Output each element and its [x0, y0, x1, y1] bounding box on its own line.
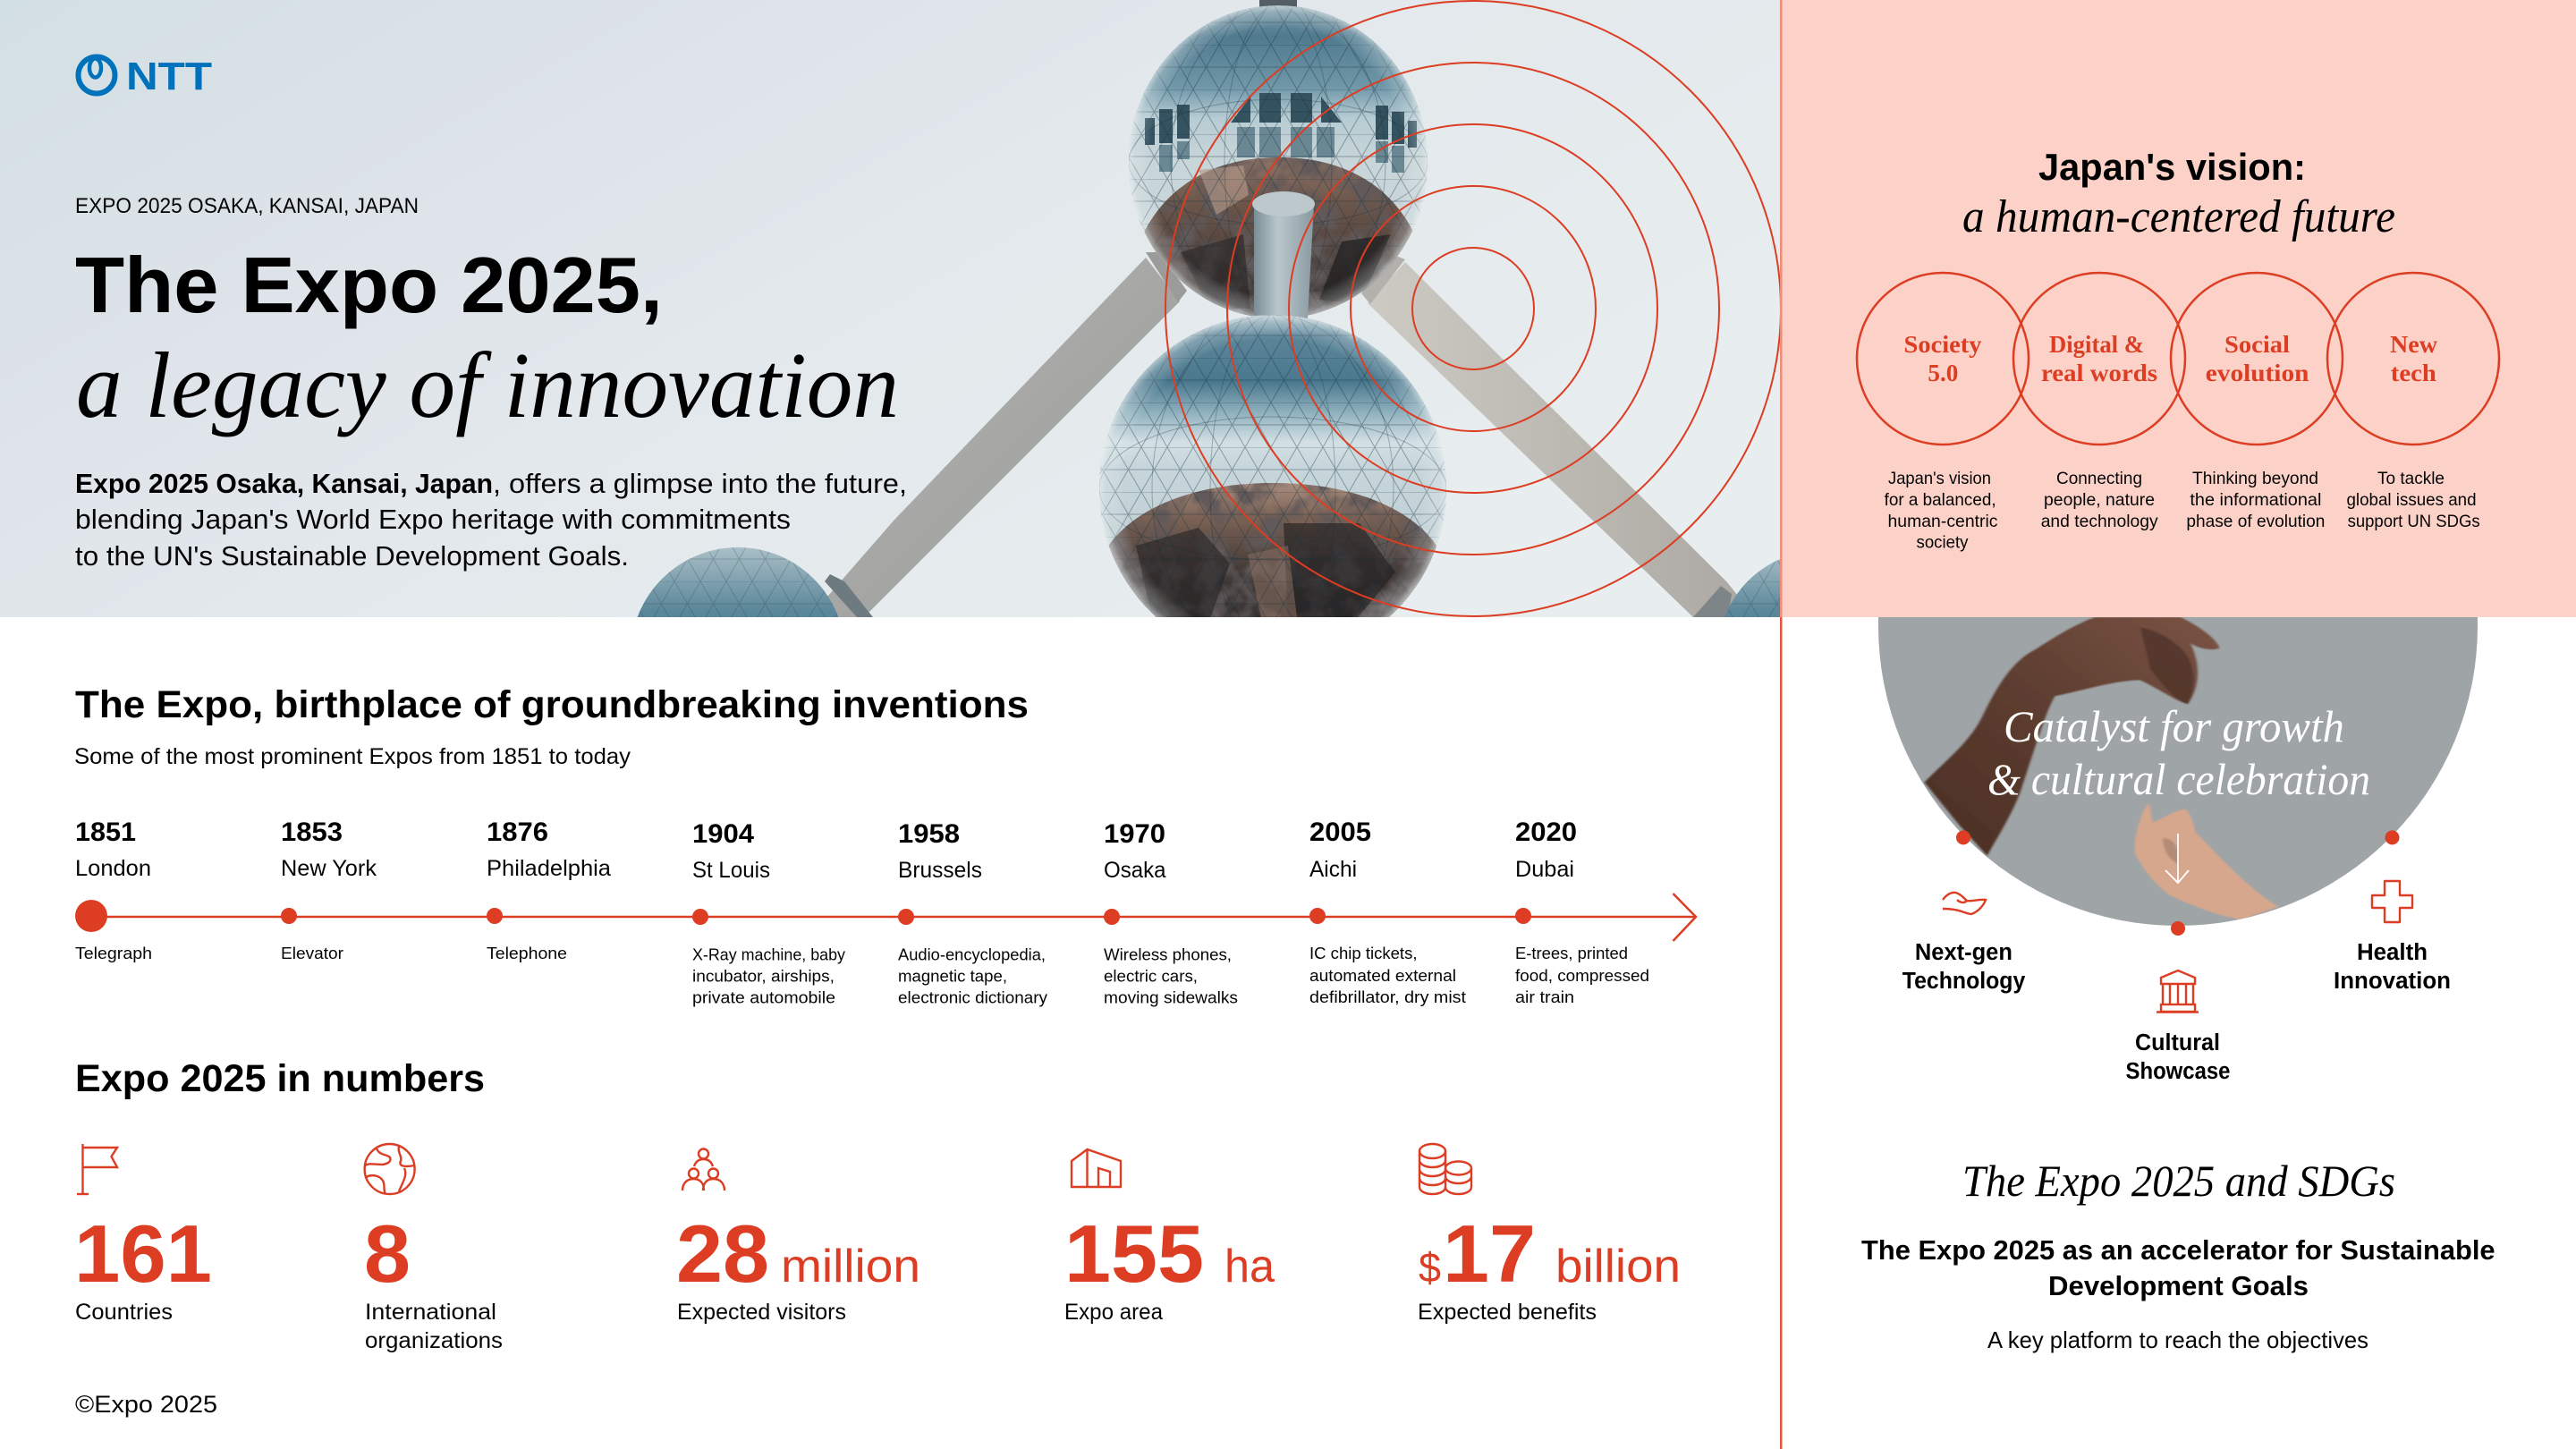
timeline arrow: [91, 894, 1696, 941]
pillar: cultural showcase: [2125, 970, 2231, 1084]
entry: 2020 Dubai: [1515, 818, 1649, 1006]
SDGs subheading: The Expo 2025 as an accelerator for Sustainable: [1861, 1234, 2496, 1266]
entry: 1970 Osaka: Wireless phones,: [1104, 945, 1232, 964]
entry: 1958 Brussels: Audio-encyclopedia,: [898, 945, 1046, 964]
intro paragraph: blending Japan's World Expo heritage with commitments: [75, 504, 791, 535]
intro paragraph: Expo 2025 Osaka, Kansai, Japan: [75, 469, 493, 499]
circle descriptions: Thinking beyond: [2192, 469, 2318, 488]
stat: 161 countries: 161: [74, 1209, 212, 1300]
eyebrow text: EXPO 2025 OSAKA, KANSAI, JAPAN: [75, 194, 419, 218]
stat: 155 ha: [1064, 1149, 1275, 1325]
pillar: cultural showcase: Cultural: [2135, 1030, 2220, 1055]
entry: 2005 Aichi: 2005: [1309, 818, 1371, 847]
stat: 161 countries: Countries: [75, 1300, 173, 1325]
pillar: health innovation: Innovation: [2334, 969, 2451, 994]
circle labels: evolution: [2206, 360, 2309, 386]
pillar: next-gen technology: Next-gen: [1915, 940, 2012, 965]
entry: 1958 Brussels: electronic dictionary: [898, 988, 1048, 1007]
vision heading: Japan's vision:: [2038, 146, 2306, 188]
pillar: next-gen technology: [1902, 893, 2026, 994]
entry: 1970 Osaka: Osaka: [1104, 858, 1166, 883]
entry: 1851 London: London: [75, 856, 151, 881]
four overlapping circles: [1857, 273, 2499, 445]
intro paragraph: [75, 469, 907, 572]
entry: 1970 Osaka: electric cars,: [1104, 967, 1198, 986]
heading: birthplace of inventions: Some of the most prominent Expos from 1851 to today: [74, 744, 631, 769]
entry: 1851 London: Telegraph: [75, 944, 152, 962]
pillar: health innovation: Health: [2357, 940, 2428, 965]
circle descriptions: support UN SDGs: [2348, 512, 2480, 531]
icon: hand: [1943, 893, 1986, 914]
stat: $17 billion: Expected benefits: [1418, 1300, 1597, 1325]
entry: 1904 St Louis: St Louis: [692, 858, 770, 883]
panel: Japan's vision: [1782, 0, 2576, 617]
entry: 1853 New York: [281, 818, 377, 962]
entry: 2005 Aichi: [1309, 818, 1466, 1006]
catalyst heading: [1987, 701, 2370, 804]
stat: 161 countries: [74, 1144, 212, 1325]
entry: 1958 Brussels: Brussels: [898, 858, 982, 883]
panel: hero photo of the Atomium: [0, 0, 1780, 617]
entry: 1970 Osaka: [1104, 819, 1238, 1007]
pillar dots: [1956, 830, 2399, 936]
circle descriptions: society: [1916, 533, 1969, 553]
logo: NTT: [79, 55, 212, 98]
entry: 1876 Philadelphia: Telephone: [487, 944, 567, 962]
stat: 8 international organizations: [364, 1144, 503, 1353]
circle descriptions: To tackle: [2377, 469, 2445, 488]
entry: 2020 Dubai: air train: [1515, 987, 1574, 1006]
circle descriptions: the informational: [2190, 490, 2321, 510]
stat: 28 million visitors: million: [781, 1241, 920, 1292]
entry: 1970 Osaka: moving sidewalks: [1104, 988, 1238, 1007]
entry: 1904 St Louis: private automobile: [692, 988, 835, 1007]
catalyst heading: & cultural celebration: [1987, 754, 2370, 804]
circle descriptions: [1885, 469, 2480, 553]
icon: people: [682, 1148, 724, 1191]
icon: cross: [2372, 881, 2412, 922]
entry: 1904 St Louis: X-Ray machine, baby: [692, 945, 846, 964]
entry: 2005 Aichi: IC chip tickets,: [1309, 944, 1417, 962]
circle descriptions: for a balanced,: [1885, 490, 1996, 510]
SDGs subheading: [1861, 1234, 2496, 1301]
SDGs subheading: Development Goals: [2048, 1270, 2309, 1301]
stat: $17 billion: billion: [1555, 1241, 1681, 1292]
circle labels: Society: [1903, 331, 1982, 358]
entry: 1876 Philadelphia: Philadelphia: [487, 856, 611, 881]
heading: birthplace of inventions: [74, 683, 1029, 769]
stat: $17 billion: [1418, 1144, 1681, 1325]
entry: 1876 Philadelphia: 1876: [487, 818, 548, 847]
entry: 2005 Aichi: automated external: [1309, 966, 1456, 985]
panel: catalyst semicircle with hands photo: [1878, 617, 2478, 930]
pillar: health innovation: [2334, 881, 2451, 994]
entry: 1851 London: 1851: [75, 818, 136, 847]
timeline dots: [75, 900, 1531, 932]
stat: $17 billion: $: [1419, 1244, 1441, 1291]
stat: 155 ha: Expo area: [1064, 1300, 1163, 1325]
SDGs note: A key platform to reach the objectives: [1987, 1326, 2368, 1353]
entry: 2005 Aichi: Aichi: [1309, 857, 1357, 882]
circle descriptions: global issues and: [2347, 490, 2476, 510]
entry: 2020 Dubai: E-trees, printed: [1515, 944, 1628, 962]
entry: 1904 St Louis: [692, 819, 846, 1007]
icon: globe: [365, 1144, 415, 1194]
circle labels: [1903, 331, 2438, 386]
intro paragraph: , offers a glimpse into the future,: [493, 469, 907, 499]
entry: 1970 Osaka: 1970: [1104, 819, 1165, 849]
heading: Expo 2025 in numbers: Expo 2025 in numbers: [75, 1057, 485, 1100]
pillar: next-gen technology: Technology: [1902, 969, 2026, 994]
timeline chart: [75, 818, 1696, 1007]
icon: building: [1072, 1149, 1121, 1187]
pillar: cultural showcase: Showcase: [2125, 1059, 2231, 1084]
stat: $17 billion: 17: [1443, 1209, 1536, 1300]
arrow: down: [2165, 834, 2189, 883]
entry: 1853 New York: Elevator: [281, 944, 343, 962]
title: [75, 241, 899, 437]
vision heading: [1962, 146, 2395, 242]
entry: 1853 New York: New York: [281, 856, 377, 881]
source note: ©Expo 2025: [75, 1391, 217, 1418]
icon: flag: [77, 1144, 117, 1194]
entry: 1853 New York: 1853: [281, 818, 343, 847]
intro paragraph: to the UN's Sustainable Development Goals.: [75, 541, 629, 572]
circle descriptions: Connecting: [2056, 469, 2142, 488]
stat: 8 international organizations: 8: [364, 1209, 411, 1300]
entry: 1958 Brussels: [898, 819, 1048, 1007]
entry: 1904 St Louis: incubator, airships,: [692, 967, 835, 986]
stat: 155 ha: 155: [1064, 1209, 1204, 1300]
entry: 2005 Aichi: defibrillator, dry mist: [1309, 987, 1466, 1006]
vision heading: a human-centered future: [1962, 191, 2395, 242]
entry: 2020 Dubai: Dubai: [1515, 857, 1574, 882]
entry: 2020 Dubai: 2020: [1515, 818, 1577, 847]
circle labels: real words: [2041, 360, 2157, 386]
entry: 1958 Brussels: 1958: [898, 819, 960, 849]
icon: temple: [2157, 970, 2199, 1013]
SDGs heading: The Expo 2025 and SDGs: [1962, 1156, 2395, 1206]
stat: 28 million visitors: Expected visitors: [677, 1300, 846, 1325]
circle labels: tech: [2391, 360, 2436, 386]
entry: 1904 St Louis: 1904: [692, 819, 754, 849]
circle labels: Social: [2224, 331, 2291, 358]
catalyst heading: Catalyst for growth: [2004, 701, 2344, 751]
entry: 2020 Dubai: food, compressed: [1515, 966, 1649, 985]
heading: birthplace of inventions: The Expo, birthplace of groundbreaking inventions: [75, 683, 1029, 726]
circle descriptions: human-centric: [1887, 512, 1998, 531]
icon: coins: [1419, 1144, 1471, 1194]
entry: 1851 London: [75, 818, 152, 962]
stat: 8 international organizations: International: [365, 1300, 496, 1325]
circle descriptions: phase of evolution: [2186, 512, 2325, 531]
circle labels: Digital &: [2049, 331, 2144, 358]
circle descriptions: people, nature: [2044, 490, 2155, 510]
stat: 155 ha: ha: [1224, 1241, 1275, 1292]
circle labels: New: [2390, 331, 2438, 358]
circle descriptions: Japan's vision: [1888, 469, 1991, 488]
stat: 28 million visitors: 28: [676, 1209, 769, 1300]
circle labels: 5.0: [1928, 360, 1958, 386]
entry: 1876 Philadelphia: [487, 818, 611, 962]
stat: 28 million visitors: [676, 1148, 920, 1325]
logo: NTT: NTT: [126, 55, 212, 98]
stat: 8 international organizations: organizations: [365, 1328, 503, 1353]
title: The Expo 2025,: [75, 241, 663, 329]
title: a legacy of innovation: [76, 333, 899, 437]
concentric red rings: [1165, 1, 1781, 616]
circle descriptions: and technology: [2041, 512, 2158, 531]
entry: 1958 Brussels: magnetic tape,: [898, 967, 1007, 986]
